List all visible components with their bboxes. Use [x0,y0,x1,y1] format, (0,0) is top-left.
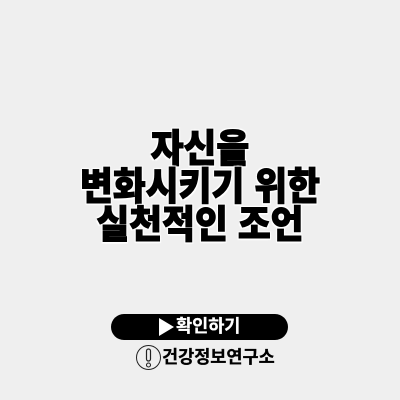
title: 실천적인 조언 [96,205,304,247]
button label: 확인하기 [176,316,240,336]
icon: exclamation circle [136,345,161,370]
title [80,128,320,247]
site name: 건강정보연구소 [162,347,275,367]
icon: play triangle [159,318,174,336]
title: 자신을 [151,129,249,171]
brand: site name with icon [136,345,275,370]
title: 변화시키기 위한 [80,167,320,209]
button: confirm [111,314,288,340]
